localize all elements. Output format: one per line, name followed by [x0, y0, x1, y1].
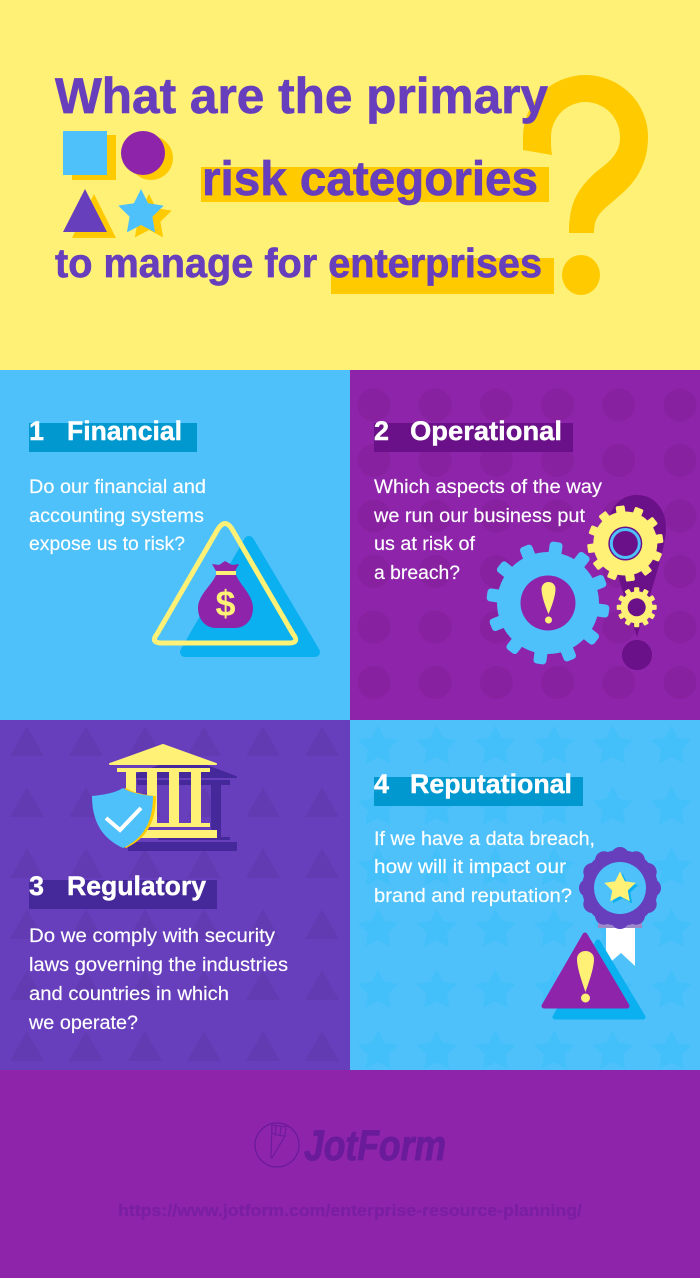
- logo: JotForm: JotForm: [304, 1122, 446, 1170]
- text: operational question: a breach?: [374, 563, 460, 584]
- panel: 3 regulatory: [0, 720, 350, 1070]
- text: regulatory question: and countries in which: [29, 984, 229, 1005]
- text: financial question: expose us to risk?: [29, 534, 185, 555]
- heading: 4 reputational: Reputational: [410, 769, 572, 799]
- text: regulatory question: we operate?: [28, 1013, 138, 1034]
- icon: small yellow gear: [617, 587, 657, 627]
- highlight: risk categories: [201, 167, 549, 202]
- panel: footer: [0, 1070, 700, 1278]
- text: regulatory question: [28, 926, 288, 1034]
- icon: warning triangle with money bag: $: [215, 583, 236, 624]
- panel: 1 financial: [0, 370, 350, 720]
- logo: JotForm: [255, 1122, 446, 1170]
- heading: 4 reputational: [374, 769, 583, 806]
- icon: award rosette with warning triangle: [544, 847, 661, 1017]
- panel: 4 reputational: [350, 720, 700, 1070]
- icon: large blue gear: [486, 541, 610, 665]
- text: reputational question: how will it impact our: [374, 857, 567, 878]
- heading: 1 financial: 1: [29, 416, 44, 446]
- icon: exclamation mark behind gears: [608, 495, 666, 670]
- heading: 1 financial: Financial: [67, 416, 182, 446]
- panel: 2 operational: [350, 370, 700, 720]
- text: regulatory question: laws governing the industries: [29, 955, 288, 976]
- text: financial question: [29, 477, 206, 555]
- icon: large question mark: [523, 75, 648, 295]
- text: operational question: Which aspects of the way: [374, 477, 603, 498]
- text: regulatory question: Do we comply with security: [29, 926, 276, 947]
- heading: line two: risk categories: [202, 153, 538, 206]
- heading: 2 operational: Operational: [410, 416, 562, 446]
- text: operational question: we run our business put: [373, 506, 586, 527]
- text: financial question: Do our financial and: [29, 477, 206, 498]
- icon: warning triangle with money bag: [154, 524, 315, 652]
- text: operational question: us at risk of: [374, 534, 476, 555]
- text: reputational question: [374, 829, 595, 907]
- text: reputational question: brand and reputation?: [374, 886, 572, 907]
- text: reputational question: If we have a data breach,: [374, 829, 595, 850]
- heading: 2 operational: 2: [374, 416, 389, 446]
- text: financial question: accounting systems: [29, 506, 204, 527]
- heading: 4 reputational: 4: [374, 769, 389, 799]
- highlight: enterprises: [331, 258, 554, 294]
- icon: bank with shield: [92, 745, 237, 851]
- text: source url: https://www.jotform.com/enterprise-resource-planning/: [118, 1202, 582, 1220]
- panel: title header: [0, 0, 700, 370]
- heading: line three: to manage for enterprises: [55, 240, 542, 286]
- heading: 1 financial: [29, 416, 197, 452]
- icon: four shapes: [63, 131, 173, 238]
- heading: 3 regulatory: [29, 871, 217, 909]
- text: operational question: [373, 477, 603, 584]
- heading: 3 regulatory: Regulatory: [67, 871, 206, 901]
- heading: 2 operational: [374, 416, 573, 452]
- heading: line one: What are the primary: [55, 68, 548, 124]
- icon: yellow gear: [587, 505, 664, 582]
- heading: 3 regulatory: 3: [29, 871, 44, 901]
